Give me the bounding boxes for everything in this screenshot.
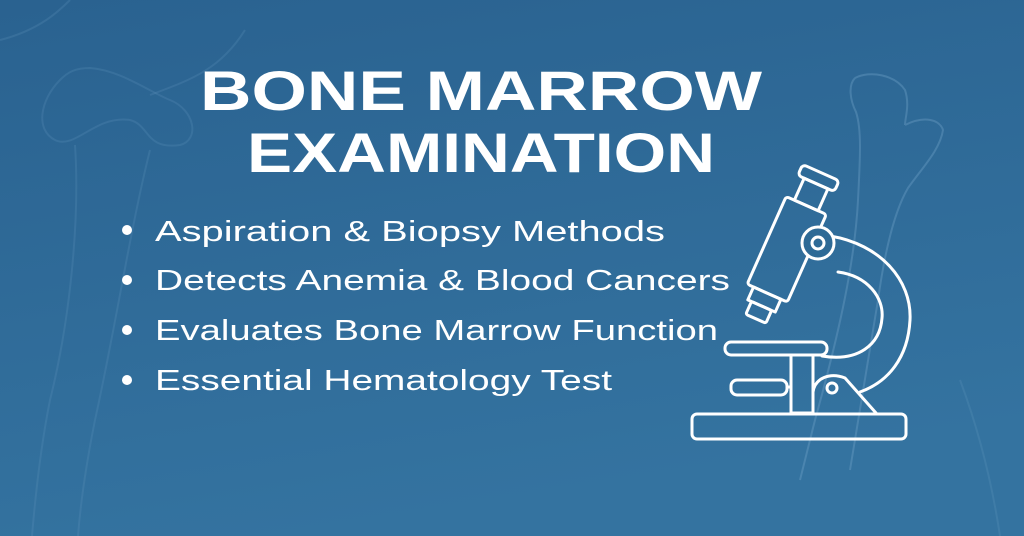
arm bbox=[822, 236, 910, 392]
bullet 1: Aspiration & Biopsy Methods bbox=[155, 216, 665, 248]
knob bbox=[802, 227, 834, 259]
pillar bbox=[791, 355, 813, 413]
bullet 1 bbox=[122, 216, 665, 248]
bullet 3: Evaluates Bone Marrow Function bbox=[155, 315, 718, 347]
background bone right bbox=[800, 74, 1000, 536]
title: EXAMINATION bbox=[247, 121, 715, 184]
lamp bbox=[731, 380, 787, 395]
foot bbox=[813, 376, 876, 413]
bullet list bbox=[122, 216, 730, 397]
background bone left bbox=[0, 0, 245, 536]
icon: microscope bbox=[692, 164, 910, 439]
stage bbox=[725, 342, 827, 355]
base bbox=[692, 414, 906, 439]
tube assembly bbox=[736, 164, 841, 328]
title: BONE MARROW bbox=[200, 59, 762, 122]
bullet 4 bbox=[122, 365, 612, 397]
bullet 4: Essential Hematology Test bbox=[155, 365, 612, 397]
bullet 2: Detects Anemia & Blood Cancers bbox=[155, 265, 730, 297]
title bbox=[200, 59, 762, 184]
